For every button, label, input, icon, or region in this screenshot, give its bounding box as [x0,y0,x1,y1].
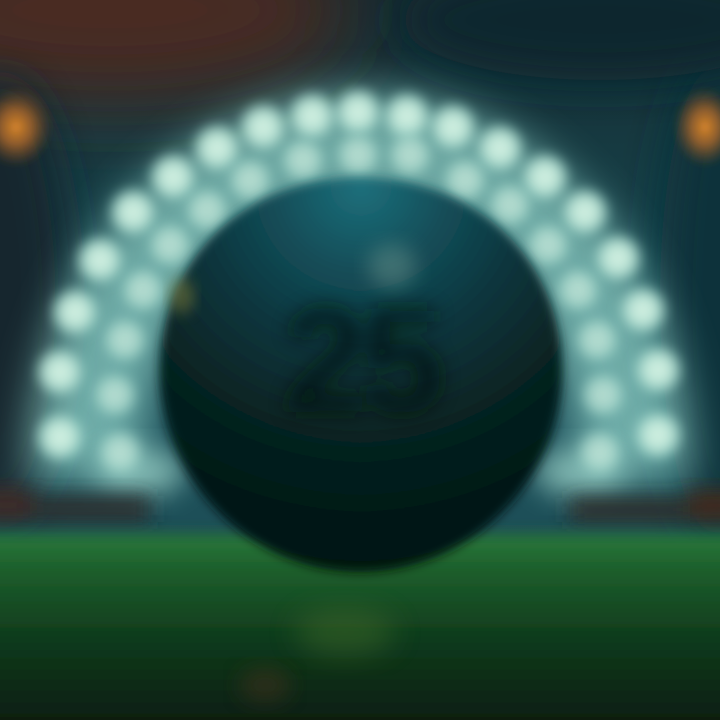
highlight at top of number [368,244,416,288]
inner arc of stadium lights [89,129,629,478]
grass field [0,534,720,720]
glint: yellow speck on ball edge [170,278,194,314]
blurred number on ball: 25 [284,276,444,444]
glow behind the light arch [85,150,635,496]
orange light right [673,87,720,167]
outer arc of stadium lights [32,84,686,465]
orange light left [0,87,52,167]
large dark teal ball [160,178,562,572]
distant stands horizon [0,488,720,522]
